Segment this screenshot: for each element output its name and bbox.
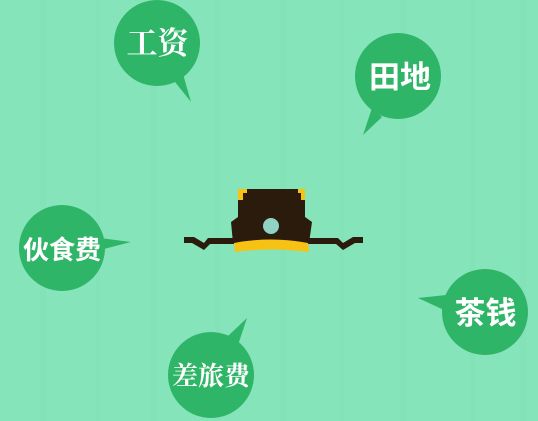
icon: official hat — [184, 189, 363, 252]
gold corners — [238, 189, 305, 200]
bubble: tea money: 茶钱 — [454, 296, 516, 331]
bubble: wages: 工资 — [126, 26, 192, 61]
bubble: food expenses: 伙食费 — [23, 235, 101, 265]
hat wings — [184, 237, 234, 250]
gold brim — [234, 240, 309, 252]
hat body — [231, 189, 312, 243]
bubble: travel expenses — [168, 318, 254, 418]
bubble: food expenses — [19, 205, 131, 291]
bubble: farmland: 田地 — [369, 60, 431, 95]
bubble: farmland — [355, 33, 441, 135]
bubble: travel expenses: 差旅费 — [172, 362, 252, 391]
bubble: wages — [114, 0, 200, 102]
hat button — [263, 218, 279, 234]
bubble: tea money — [418, 269, 528, 355]
